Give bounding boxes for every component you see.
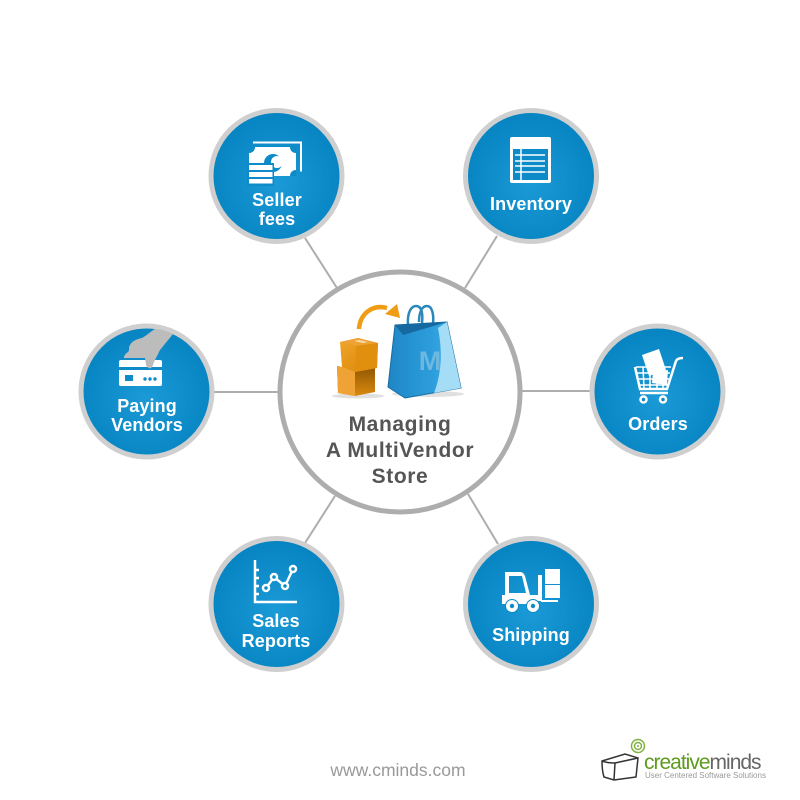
icon: forklift xyxy=(502,569,560,612)
panel: central hub xyxy=(280,272,520,512)
panel: inventory xyxy=(466,110,596,242)
panel: orders xyxy=(592,326,723,457)
panel: paying vendors: Vendors xyxy=(111,415,183,435)
panel: paying vendors xyxy=(81,326,212,457)
logo: creativeminds xyxy=(602,740,766,780)
icon: card and hand xyxy=(119,329,173,386)
icon: money xyxy=(247,142,302,186)
panel: seller fees xyxy=(211,110,342,242)
website url: www.cminds.com xyxy=(329,760,466,780)
heading: hub title: A MultiVendor xyxy=(326,439,474,462)
label: Inventory xyxy=(490,194,572,214)
panel: seller fees: fees xyxy=(259,209,295,229)
icon: line chart xyxy=(255,560,297,602)
panel: shipping xyxy=(466,538,596,670)
tagline: User Centered Software Solutions xyxy=(645,771,766,780)
icon: boxes and shopping bag xyxy=(332,304,464,398)
connector lines xyxy=(213,236,592,544)
label: Orders xyxy=(628,414,688,434)
label: Sales xyxy=(252,611,300,631)
icon: shopping cart xyxy=(635,349,683,402)
icon: boxes and shopping bag: M xyxy=(419,346,441,376)
label: Shipping xyxy=(492,625,570,645)
brand name: creativeminds xyxy=(644,751,761,774)
heading: hub title: Managing xyxy=(349,413,451,436)
panel: sales reports xyxy=(211,538,342,670)
label: Seller xyxy=(252,190,302,210)
heading: hub title: Store xyxy=(372,465,428,488)
icon: table xyxy=(510,137,551,183)
label: Paying xyxy=(117,396,177,416)
heading: hub title xyxy=(326,413,474,488)
panel: sales reports: Reports xyxy=(242,631,310,651)
icon: cube and spiral xyxy=(602,740,644,780)
